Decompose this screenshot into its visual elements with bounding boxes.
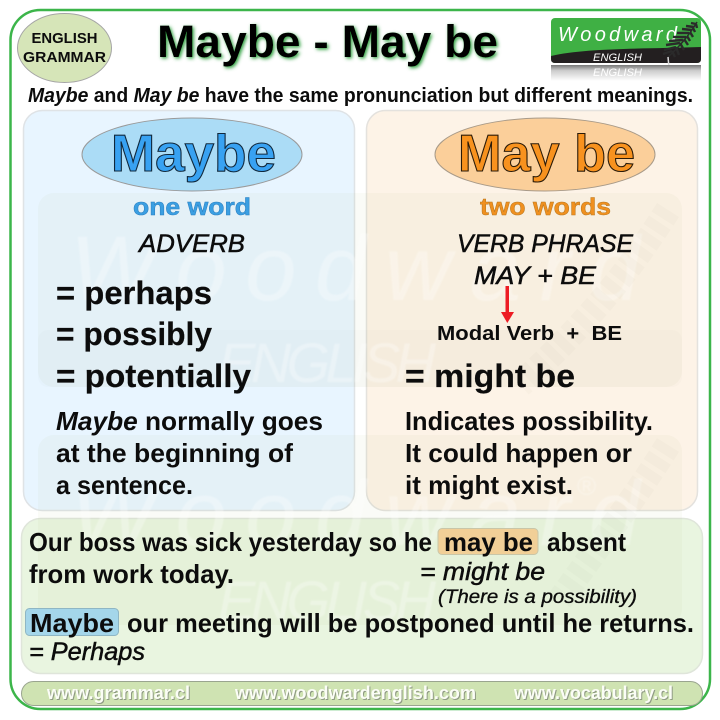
footer bar: www.grammar.cl bbox=[46, 683, 190, 703]
synonyms list bbox=[56, 275, 251, 394]
two words: two words bbox=[480, 194, 611, 221]
example sentence one: Our boss was sick yesterday so he bbox=[29, 527, 432, 557]
footer bar: www.vocabulary.cl bbox=[514, 684, 674, 704]
footer bar: www.woodwardenglish.com bbox=[235, 684, 477, 704]
modal verb plus be: Modal Verb + BE bbox=[437, 323, 622, 345]
part of speech: adverb: ADVERB bbox=[137, 230, 245, 258]
usage note: Maybe normally goes bbox=[56, 406, 323, 436]
meaning note bbox=[405, 406, 653, 500]
meaning note: it might exist. bbox=[405, 470, 573, 500]
usage note bbox=[56, 406, 323, 500]
arrow: may to modal verb bbox=[501, 286, 514, 323]
watermark bbox=[38, 193, 682, 632]
synonyms list: = potentially bbox=[56, 358, 251, 394]
icon: fern bbox=[663, 22, 697, 78]
part of speech: verb phrase bbox=[457, 230, 633, 290]
highlight: may be bbox=[438, 528, 538, 554]
watermark: ENGLISH bbox=[218, 569, 437, 632]
May be column bbox=[405, 118, 655, 500]
logo reflection: ENGLISH bbox=[593, 67, 642, 79]
gloss: perhaps: = Perhaps bbox=[29, 638, 145, 666]
example sentence one bbox=[29, 527, 626, 589]
part of speech: verb phrase: MAY + BE bbox=[474, 262, 596, 290]
usage note: at the beginning of bbox=[56, 438, 293, 468]
part of speech: verb phrase: VERB PHRASE bbox=[457, 230, 633, 258]
logo: Woodward English bbox=[551, 18, 701, 81]
example sentence two: our meeting will be postponed until he returns. bbox=[127, 608, 694, 638]
examples bbox=[26, 527, 694, 666]
meaning note: Indicates possibility. bbox=[405, 406, 653, 436]
logo: Woodward English: Woodward bbox=[558, 24, 678, 46]
example sentence two: Maybe bbox=[30, 608, 114, 638]
footer bar bbox=[22, 682, 702, 706]
highlight: Maybe bbox=[26, 608, 118, 636]
title: Maybe - May be bbox=[157, 16, 498, 67]
usage note: a sentence. bbox=[56, 470, 193, 500]
Maybe column bbox=[56, 118, 323, 500]
watermark: ® bbox=[577, 471, 596, 501]
footer bar: www.grammar.cl bbox=[47, 684, 191, 704]
gloss: might be: = might be bbox=[420, 558, 545, 586]
footer bar: www.woodwardenglish.com bbox=[234, 683, 476, 703]
badge: English Grammar: ENGLISH bbox=[32, 30, 98, 47]
gloss: might be: (There is a possibility) bbox=[438, 587, 637, 608]
example sentence one: may be bbox=[444, 527, 533, 557]
panel: examples background bbox=[22, 518, 702, 674]
might be: = might be bbox=[405, 358, 575, 394]
watermark: Woodward bbox=[70, 218, 643, 320]
oval heading: May be: May be bbox=[458, 125, 635, 183]
one word: one word bbox=[133, 194, 251, 221]
logo reflection bbox=[551, 65, 701, 81]
example sentence one: absent bbox=[547, 527, 626, 557]
oval heading: May be bbox=[435, 118, 655, 191]
watermark: Woodward bbox=[70, 463, 643, 565]
panel: May be background bbox=[366, 110, 698, 510]
synonyms list: = possibly bbox=[56, 316, 212, 352]
badge: English Grammar bbox=[18, 14, 112, 82]
footer bar: www.vocabulary.cl bbox=[513, 683, 673, 703]
logo: Woodward English: ENGLISH bbox=[593, 52, 642, 64]
panel: Maybe background bbox=[24, 110, 354, 510]
oval heading: Maybe: Maybe bbox=[111, 125, 276, 183]
meaning note: It could happen or bbox=[405, 438, 632, 468]
watermark: ENGLISH bbox=[218, 331, 437, 394]
oval heading: Maybe bbox=[82, 118, 302, 191]
gloss: might be bbox=[420, 558, 637, 608]
subtitle: Maybe and May be have the same pronunciation but different meanings. bbox=[28, 85, 693, 107]
badge: English Grammar: GRAMMAR bbox=[23, 49, 106, 66]
example sentence one: from work today. bbox=[29, 559, 234, 589]
synonyms list: = perhaps bbox=[56, 275, 212, 311]
